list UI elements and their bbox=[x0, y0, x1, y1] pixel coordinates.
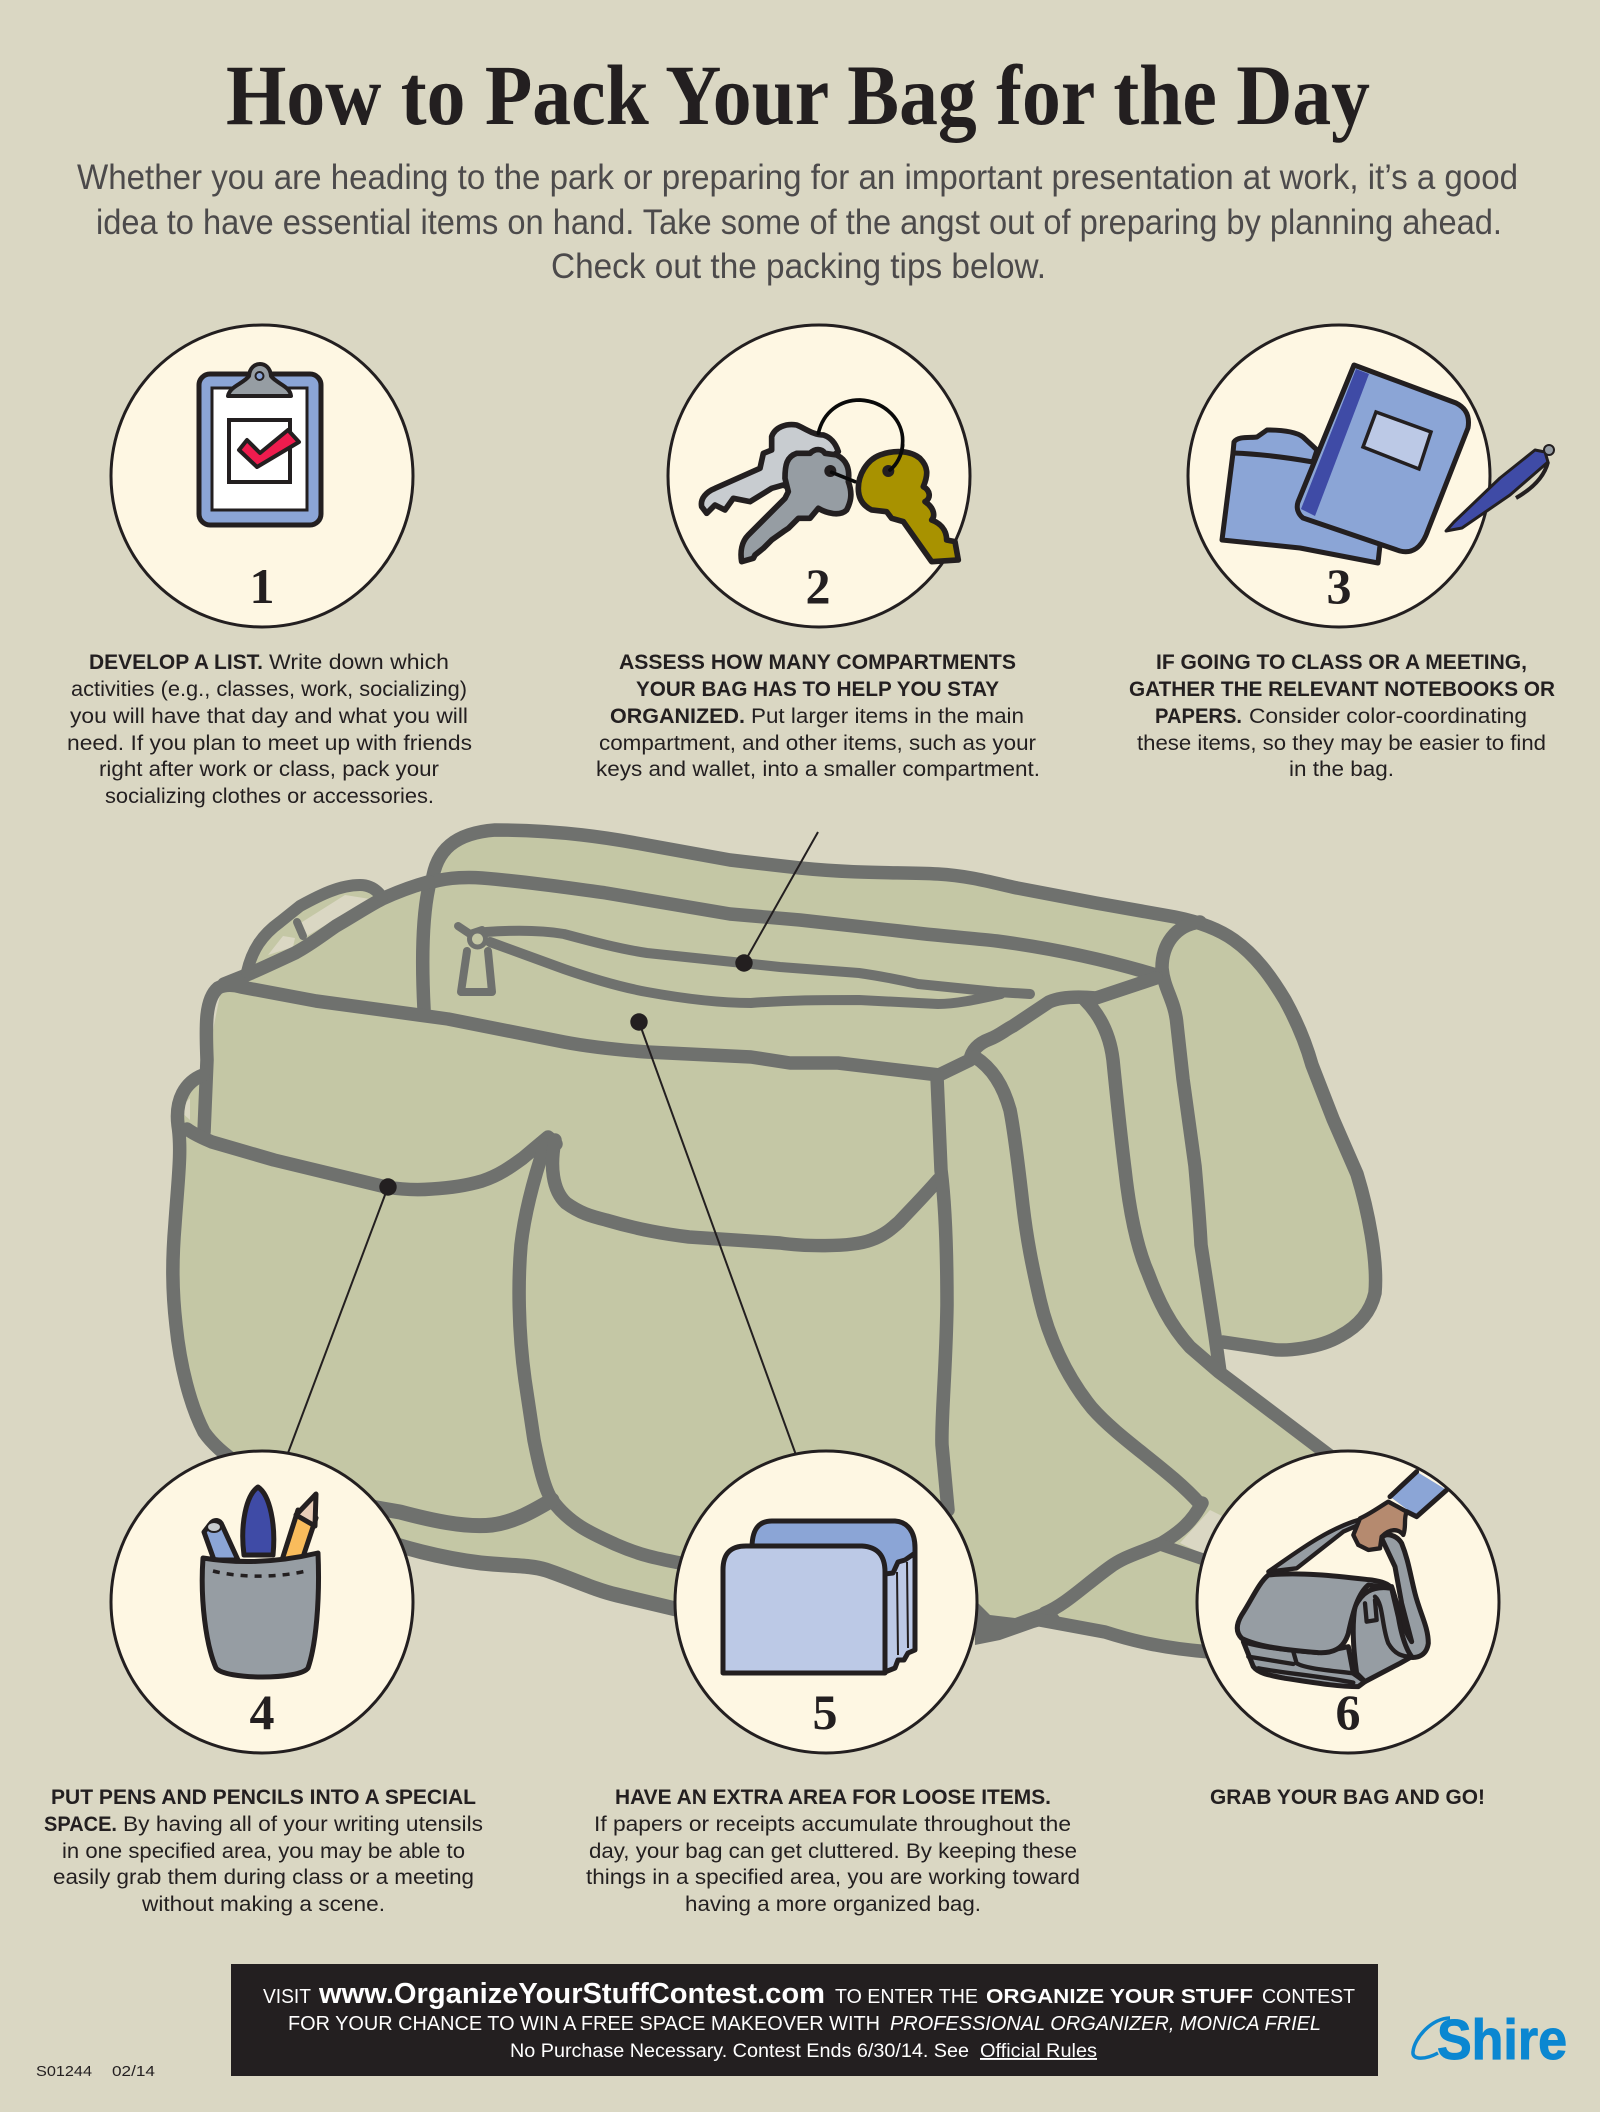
text: assess compartments: ASSESS HOW MANY COMPARTMENTS bbox=[619, 651, 1016, 674]
text: develop a list: activities (e.g., classes, work, socializing) bbox=[71, 678, 467, 701]
code and date: 02/14 bbox=[112, 2063, 155, 2080]
text: gather notebooks: Consider color-coordinating bbox=[1249, 705, 1527, 728]
number 3: 3 bbox=[1326, 558, 1352, 614]
contest banner: www.OrganizeYourStuffContest.com bbox=[318, 1978, 825, 2010]
number 1: 1 bbox=[250, 558, 274, 614]
number 2: 2 bbox=[806, 558, 830, 614]
code and date: S01244 bbox=[36, 2063, 92, 2080]
text: loose items: day, your bag can get cluttered. By keeping these bbox=[589, 1840, 1077, 1863]
intro text: Whether you are heading to the park or preparing for an important presentation at work, it’s a good bbox=[77, 158, 1518, 197]
contest banner: PROFESSIONAL ORGANIZER, MONICA FRIEL bbox=[890, 2013, 1321, 2035]
panel: step 2 bbox=[596, 325, 1040, 781]
contest banner: No Purchase Necessary. Contest Ends 6/30/14. See bbox=[510, 2041, 969, 2062]
logo: Shire: Shire bbox=[1437, 2008, 1567, 2072]
contest banner: ORGANIZE YOUR STUFF bbox=[986, 1985, 1253, 2008]
contest banner: CONTEST bbox=[1262, 1985, 1355, 2008]
contest banner: TO ENTER THE bbox=[835, 1985, 978, 2008]
text: loose items: HAVE AN EXTRA AREA FOR LOOSE ITEMS. bbox=[615, 1786, 1051, 1809]
panel: step 3 bbox=[1129, 325, 1555, 781]
text: assess compartments: Put larger items in the main bbox=[751, 705, 1024, 728]
text: develop a list: socializing clothes or accessories. bbox=[105, 785, 434, 808]
intro text bbox=[77, 158, 1518, 286]
callout line: step 4 pens bbox=[288, 1178, 397, 1453]
bag illustration bbox=[173, 830, 1376, 1652]
icon: folder, notebook and pen bbox=[1222, 365, 1554, 563]
text: assess compartments: keys and wallet, into a smaller compartment. bbox=[596, 758, 1040, 781]
text: develop a list: need. If you plan to meet up with friends bbox=[67, 732, 472, 755]
text: develop a list bbox=[67, 651, 472, 808]
icon: clipboard bbox=[199, 364, 321, 525]
contest banner: FOR YOUR CHANCE TO WIN A FREE SPACE MAKEOVER WITH bbox=[288, 2013, 880, 2035]
text: pens and pencils bbox=[44, 1786, 483, 1916]
panel: step 1 bbox=[67, 325, 472, 808]
icon: pen cup bbox=[202, 1487, 319, 1677]
text: gather notebooks: IF GOING TO CLASS OR A MEETING, bbox=[1156, 651, 1527, 674]
text: pens and pencils: without making a scene. bbox=[141, 1893, 385, 1916]
title: How to Pack Your Bag for the Day bbox=[226, 47, 1370, 143]
text: pens and pencils: PUT PENS AND PENCILS INTO A SPECIAL bbox=[51, 1786, 476, 1809]
text: pens and pencils: in one specified area, you may be able to bbox=[62, 1840, 465, 1863]
text: gather notebooks: PAPERS. bbox=[1155, 705, 1242, 728]
icon: pen bbox=[1446, 445, 1554, 531]
panel: step 5 bbox=[586, 1451, 1080, 1916]
text: gather notebooks bbox=[1129, 651, 1555, 781]
icon: hand holding bag bbox=[1237, 1472, 1447, 1687]
contest banner: VISIT bbox=[263, 1985, 311, 2008]
text: assess compartments bbox=[596, 651, 1040, 781]
text: develop a list: DEVELOP A LIST. bbox=[89, 651, 263, 674]
text: loose items bbox=[586, 1786, 1080, 1916]
text: loose items: things in a specified area, you are working toward bbox=[586, 1866, 1080, 1889]
code and date bbox=[36, 2063, 155, 2080]
number 5: 5 bbox=[812, 1684, 838, 1740]
text: assess compartments: ORGANIZED. bbox=[610, 705, 745, 728]
panel: step 4 bbox=[44, 1451, 483, 1916]
text: pens and pencils: By having all of your writing utensils bbox=[123, 1813, 483, 1836]
intro text: idea to have essential items on hand. Take some of the angst out of preparing by planning ahead. bbox=[96, 203, 1502, 242]
number 6: 6 bbox=[1336, 1684, 1360, 1740]
contest banner: Official Rules bbox=[980, 2041, 1097, 2062]
text: grab your bag: GRAB YOUR BAG AND GO! bbox=[1210, 1786, 1485, 1809]
text: pens and pencils: SPACE. bbox=[44, 1813, 117, 1836]
icon: keys bbox=[701, 400, 958, 562]
text: develop a list: you will have that day and what you will bbox=[70, 705, 468, 728]
callout line: step 2 compartments bbox=[735, 832, 818, 972]
text: loose items: If papers or receipts accumulate throughout the bbox=[594, 1813, 1071, 1836]
text: assess compartments: YOUR BAG HAS TO HELP YOU STAY bbox=[636, 678, 999, 701]
contest banner bbox=[231, 1964, 1378, 2076]
panel: step 6 bbox=[1197, 1451, 1499, 1809]
text: loose items: having a more organized bag. bbox=[685, 1893, 981, 1916]
text: pens and pencils: easily grab them during class or a meeting bbox=[53, 1866, 474, 1889]
text: develop a list: Write down which bbox=[269, 651, 449, 674]
text: develop a list: right after work or class, pack your bbox=[99, 758, 439, 781]
text: assess compartments: compartment, and other items, such as your bbox=[599, 732, 1036, 755]
text: gather notebooks: GATHER THE RELEVANT NOTEBOOKS OR bbox=[1129, 678, 1555, 701]
text: gather notebooks: in the bag. bbox=[1289, 758, 1394, 781]
callout line: step 5 loose items bbox=[630, 1013, 796, 1455]
text: gather notebooks: these items, so they may be easier to find bbox=[1137, 732, 1546, 755]
number 4: 4 bbox=[250, 1684, 274, 1740]
intro text: Check out the packing tips below. bbox=[551, 247, 1046, 286]
icon: accordion folder bbox=[723, 1521, 915, 1673]
